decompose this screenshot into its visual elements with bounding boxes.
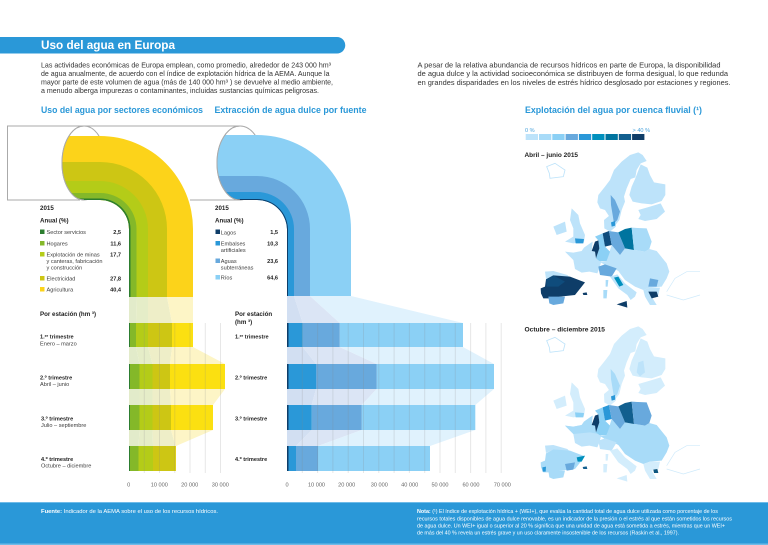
legend: sectors: Explotación de minas	[46, 252, 100, 258]
axis: sectors: 10 000	[151, 482, 168, 488]
legend: sectors: 2015	[40, 205, 54, 212]
title banner	[0, 37, 345, 54]
colour scale legend	[525, 128, 650, 140]
seasonal bars: sectors	[129, 323, 225, 471]
legend: sources: subterráneas	[221, 266, 254, 272]
pipe: water use by sector	[50, 136, 193, 297]
intro text right: A pesar de la relativa abundancia de recursos hídricos en parte de Europa, la disponibilidad	[418, 60, 720, 70]
seasonal labels: sectors: Enero – marzo	[40, 341, 77, 347]
legend: sources: Embalses	[221, 242, 246, 248]
colour scale legend: > 40 %	[632, 128, 650, 134]
heading: sources: Extracción de agua dulce por fuente	[214, 105, 366, 115]
note: recursos totales disponibles de agua dulce renovable, es un indicador de la presión o el estrés al que están sometidos los recursos	[417, 516, 732, 522]
legend: sources: Ríos	[221, 276, 233, 282]
legend: sources: artificiales	[221, 248, 246, 254]
seasonal labels: sectors	[40, 311, 96, 470]
legend: sectors: Agricultura	[46, 288, 74, 294]
seasonal labels: sources: 2.º trimestre	[235, 376, 267, 382]
seasonal labels: sectors: Abril – junio	[40, 382, 69, 388]
intro text left: a menudo alberga impurezas o contaminantes, incluidas sustancias químicas peligrosas.	[41, 86, 319, 95]
seasonal labels: sectors: 1.ᵉʳ trimestre	[40, 334, 74, 340]
legend: sectors: y canteras, fabricación	[46, 259, 102, 265]
seasonal labels: sectors: Julio – septiembre	[41, 423, 86, 429]
seasonal labels: sectors: 3.º trimestre	[41, 416, 73, 422]
intro text left: de agua anualmente, de acuerdo con el índice de explotación hídrica de la AEMA. Aunque la	[41, 69, 330, 78]
axis: sources: 0	[285, 482, 289, 488]
legend: sources: Aguas	[221, 259, 237, 265]
legend: sectors: Electricidad	[46, 276, 75, 282]
legend: sectors: 2,5	[113, 230, 121, 236]
legend: sources: 1,5	[270, 230, 278, 236]
axis: sources: 20 000	[338, 482, 355, 488]
legend: sources: 64,6	[267, 276, 278, 282]
axis: sources: 60 000	[462, 482, 480, 488]
axis: sectors: 20 000	[181, 482, 198, 488]
legend: sectors: 11,6	[110, 242, 121, 248]
seasonal links: sectors	[129, 297, 225, 446]
tap rim	[62, 126, 240, 200]
colour scale legend: 0 %	[525, 128, 535, 134]
seasonal labels: sectors: Por estación (hm ³)	[40, 311, 96, 318]
heading: sectors: Uso del agua por sectores económicos	[41, 105, 203, 115]
seasonal labels: sectors: Octubre – diciembre	[41, 464, 91, 470]
map: April-June 2015	[541, 152, 700, 308]
axis: sectors: 30 000	[212, 482, 229, 488]
note	[417, 509, 732, 536]
intro text right	[418, 60, 730, 87]
legend: sources	[215, 205, 278, 282]
heading: map: Explotación del agua por cuenca fluvial (¹)	[525, 105, 702, 115]
seasonal labels: sources: 1.ᵉʳ trimestre	[235, 334, 269, 340]
legend: sectors: Hogares	[46, 242, 68, 248]
map title: April-June: Abril – junio 2015	[524, 152, 579, 159]
seasonal labels: sectors: 2.º trimestre	[40, 376, 72, 382]
axis: sources: 70 000	[494, 482, 511, 488]
legend: sources: Lagos	[221, 230, 236, 236]
axis: sources: 10 000	[308, 482, 325, 488]
grid lines: sectors	[144, 323, 220, 473]
legend: sources: Anual (%)	[215, 218, 244, 224]
axis: sectors: 0	[127, 482, 130, 488]
legend: sectors: y construcción	[46, 266, 82, 272]
title banner: Uso del agua en Europa	[41, 40, 176, 52]
legend: sectors: Anual (%)	[40, 218, 69, 224]
pipe: freshwater abstraction by source	[218, 135, 351, 296]
footer band	[0, 502, 768, 545]
axis: sources: 40 000	[401, 482, 418, 488]
legend: sources: 10,3	[267, 242, 278, 248]
seasonal labels: sources: (hm ³)	[235, 319, 252, 326]
source: Fuente: Indicador de la AEMA sobre el uso de los recursos hídricos.	[41, 509, 218, 515]
note: de más del 40 % revela un estrés grave y un uso claramente insostenible de los recursos (Raskin et al., 1997).	[417, 530, 679, 536]
legend: sectors: 17,7	[110, 252, 121, 258]
seasonal bars: sources	[287, 323, 494, 471]
grid lines: sources	[302, 323, 501, 473]
seasonal links: sources	[287, 296, 494, 446]
seasonal labels: sources: Por estación	[235, 311, 272, 318]
legend: sectors: 27,8	[110, 276, 121, 282]
legend: sectors: Sector servicios	[46, 230, 86, 236]
map title: October-December: Octubre – diciembre 2015	[524, 326, 606, 334]
note: de agua dulce. Un WEI+ igual o superior al 20 % significa que una unidad de agua está sometida a estrés, mientras que un WEI+	[417, 524, 725, 530]
legend: sectors	[40, 205, 122, 294]
seasonal labels: sources	[235, 311, 272, 463]
intro text left: mayor parte de este volumen de agua (más de 140 000 hm³ ) se devuelve al medio ambiente,	[41, 78, 333, 86]
axis: sources: 50 000	[431, 482, 449, 488]
note: Nota: (¹) El índice de explotación hídrica + (WEI+), que evalúa la cantidad total de agua dulce utilizada como porcentaje de los	[417, 509, 718, 515]
map: October-December 2015	[541, 326, 700, 482]
axis: sources	[285, 482, 511, 488]
axis: sources: 30 000	[371, 482, 388, 488]
tap outline	[8, 126, 263, 200]
seasonal labels: sectors: 4.º trimestre	[41, 457, 73, 463]
intro text left	[41, 60, 333, 95]
legend: sectors: 40,4	[110, 288, 122, 294]
axis: sectors	[127, 482, 229, 488]
seasonal labels: sources: 4.º trimestre	[235, 457, 267, 463]
legend: sources: 2015	[215, 205, 229, 212]
intro text right: en grandes disparidades en los niveles de estrés hídrico desglosado por estaciones y regiones.	[418, 78, 730, 87]
seasonal labels: sources: 3.º trimestre	[235, 416, 267, 422]
intro text right: de agua dulce y la actividad socioeconómica se distribuyen de forma desigual, lo que redunda	[418, 69, 729, 78]
intro text left: Las actividades económicas de Europa emplean, como promedio, alrededor de 243 000 hm³	[41, 60, 332, 70]
legend: sources: 23,6	[267, 259, 278, 265]
